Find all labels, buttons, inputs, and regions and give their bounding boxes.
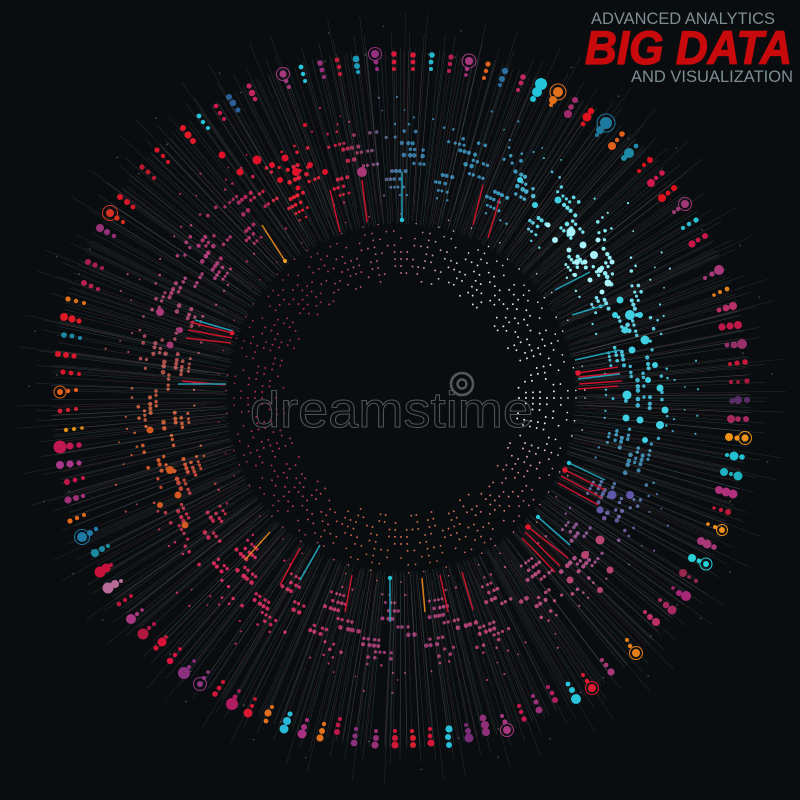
bright cyan dot cluster	[517, 177, 668, 443]
bright data bursts	[178, 172, 622, 622]
title block	[585, 9, 793, 86]
icon: watermark spiral logo	[451, 373, 473, 395]
watermark: dreamstime	[250, 382, 533, 438]
red and pink dot accents	[146, 123, 634, 593]
title block: ADVANCED ANALYTICS	[591, 9, 775, 28]
title block: BIG DATA	[585, 21, 792, 74]
title block: AND VISUALIZATION	[631, 67, 793, 86]
outer ring of dot clusters	[54, 48, 752, 749]
